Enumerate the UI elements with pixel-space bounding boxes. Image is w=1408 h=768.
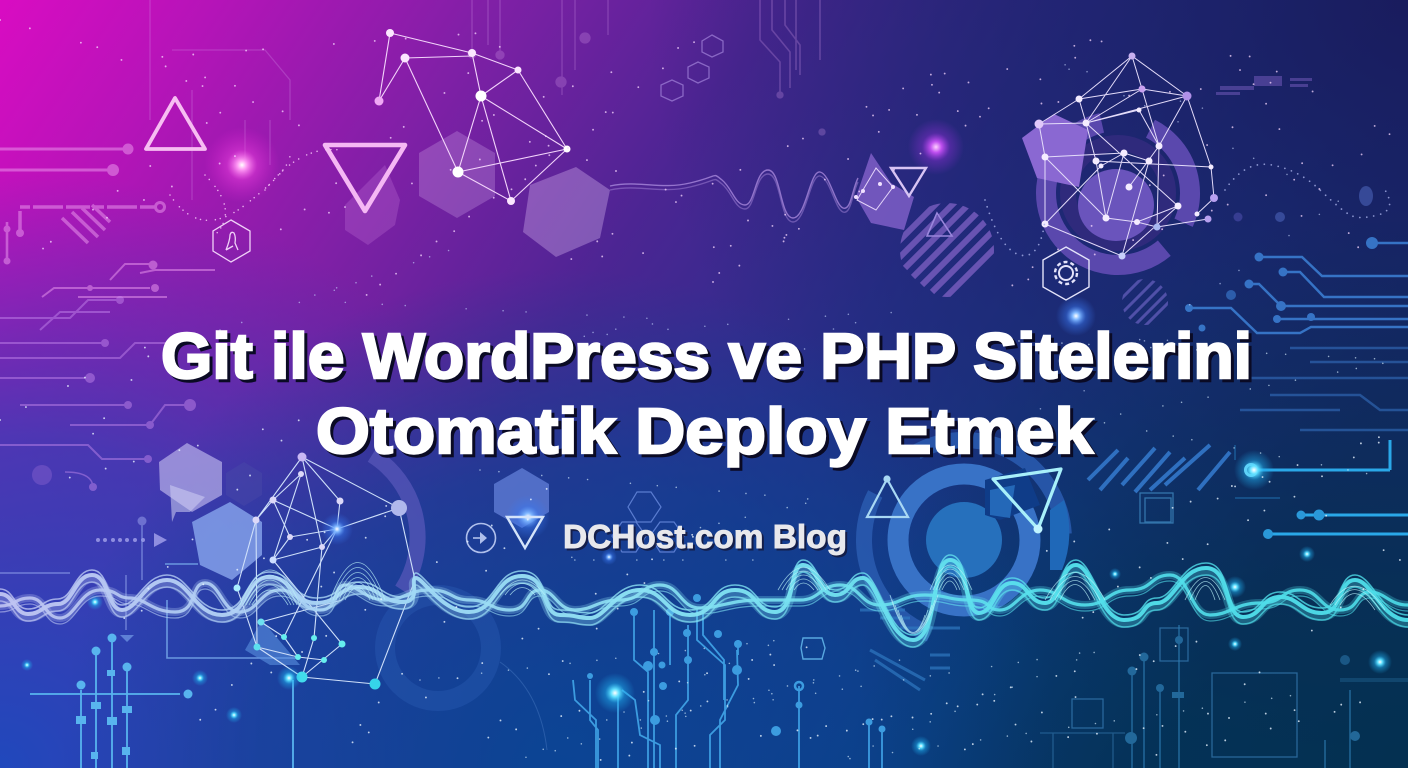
hexagons behind subtitle bbox=[612, 492, 684, 552]
triangle outline up bbox=[146, 98, 205, 149]
circuit lines right bbox=[1185, 237, 1408, 430]
striped circle bbox=[900, 203, 994, 297]
ghost details right top bbox=[1216, 76, 1373, 222]
dim hexagon bbox=[226, 462, 262, 506]
blue glow at triangle bbox=[506, 495, 550, 539]
play circle icon bbox=[466, 524, 496, 552]
dim shapes near wave bbox=[860, 610, 960, 690]
small triangle outline bbox=[927, 213, 952, 236]
title bbox=[161, 320, 1252, 467]
blue glow under gear bbox=[1056, 296, 1096, 336]
glowing points bottom bbox=[21, 546, 1392, 756]
hexagon blue centre bbox=[494, 468, 549, 528]
line connectors left bbox=[0, 516, 146, 642]
network graph bottom left bbox=[234, 452, 415, 690]
hexagons top left bbox=[419, 131, 495, 218]
triangle outline large bbox=[993, 469, 1061, 534]
hexagon gear icon bbox=[1043, 247, 1089, 300]
circuit traces bottom centre bbox=[573, 594, 886, 768]
circuit lines left bbox=[0, 144, 215, 297]
circuit traces bottom right bbox=[1125, 625, 1408, 768]
sine waveform centre bbox=[610, 170, 858, 222]
triangle outline small bbox=[867, 476, 908, 517]
hexagon large purple bbox=[523, 167, 610, 257]
wave ribbons bbox=[0, 555, 1408, 647]
diagonal stripes right bbox=[1088, 445, 1230, 492]
subtitle: DCHost.com Blog bbox=[563, 518, 847, 555]
network graph top left bbox=[374, 29, 570, 205]
ring bottom centre left bbox=[385, 595, 547, 750]
dotted curve right bbox=[985, 164, 1390, 256]
hexagons bottom left bbox=[159, 443, 262, 580]
dashed arrow left bbox=[96, 533, 167, 547]
small triangle cluster bbox=[854, 153, 926, 230]
triangle outline down bbox=[325, 145, 405, 211]
small striped circle bbox=[1122, 279, 1168, 325]
frame line bottom left bbox=[165, 564, 300, 658]
circuit lines left middle bbox=[0, 296, 196, 491]
small hexagons top centre bbox=[661, 35, 723, 101]
title: Git ile WordPress ve PHP Sitelerini bbox=[161, 320, 1252, 392]
outline hexagon bottom bbox=[801, 638, 825, 659]
magenta glow bbox=[908, 119, 964, 175]
hexagon icon person bbox=[213, 220, 250, 262]
faint circuit traces top bbox=[150, 0, 825, 200]
title: Otomatik Deploy Etmek bbox=[316, 395, 1093, 467]
dim shard below triangle bbox=[345, 165, 400, 245]
target rings top right bbox=[1017, 92, 1219, 294]
outline squares right bbox=[1040, 493, 1297, 768]
arc ring left bbox=[372, 455, 418, 590]
key circuit and cyan lines right bbox=[1235, 440, 1408, 539]
wave fine line bundles bbox=[240, 562, 1385, 634]
network graph top right bbox=[1034, 52, 1218, 260]
cyan glow key bbox=[1234, 450, 1274, 490]
triangle outline subtitle bbox=[507, 517, 543, 548]
pink glow bbox=[204, 127, 280, 203]
target rings bottom right bbox=[836, 412, 1092, 668]
circuit verticals bottom left bbox=[30, 634, 293, 768]
